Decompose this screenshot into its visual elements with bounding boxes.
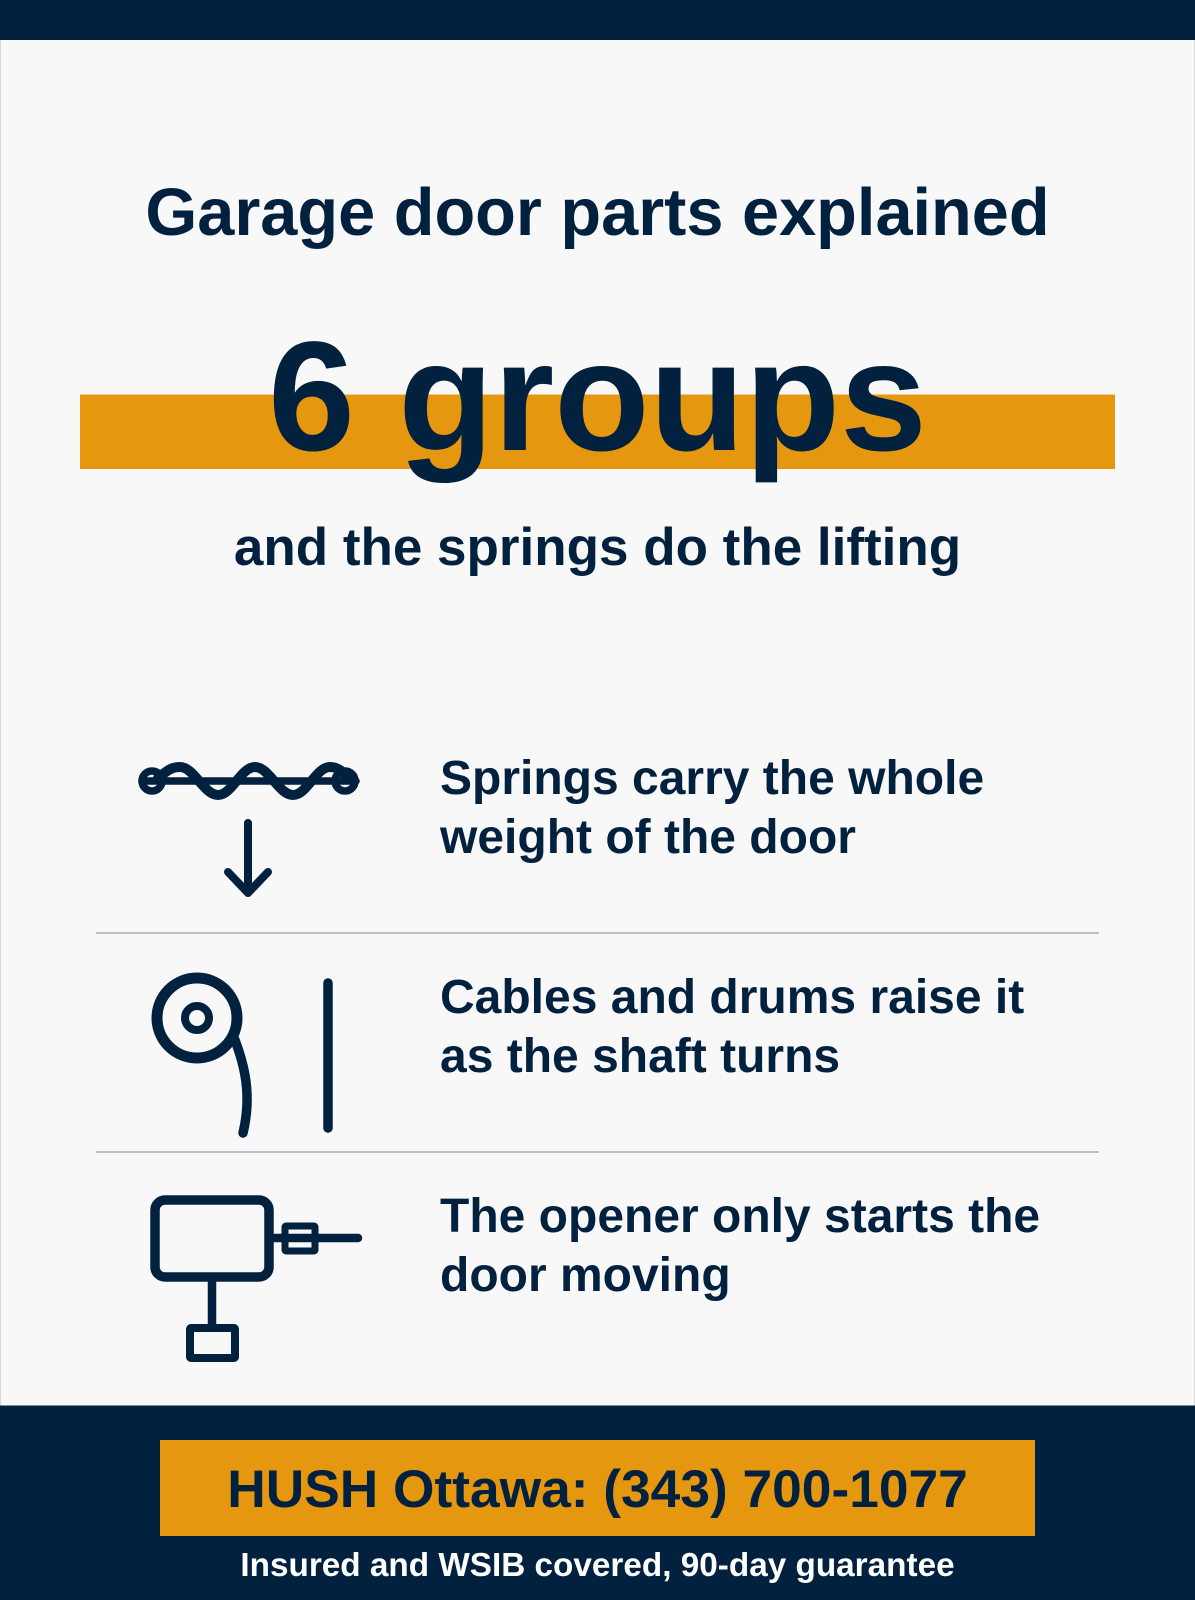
phone number: HUSH Ottawa: (343) 700-1077 (227, 1460, 968, 1519)
guarantee line: Insured and WSIB covered, 90-day guarantee (240, 1547, 955, 1584)
call to action box (160, 1440, 1035, 1536)
text: opener: The opener only starts the (440, 1190, 1040, 1243)
highlight band (80, 394, 1115, 469)
footer band (0, 1406, 1195, 1600)
text: cables: Cables and drums raise it (440, 971, 1024, 1024)
title: Garage door parts explained (145, 176, 1050, 250)
divider (96, 932, 1099, 934)
icon: spring with down arrow (142, 767, 356, 893)
divider (96, 1151, 1099, 1153)
top bar (0, 0, 1195, 40)
text: cables: as the shaft turns (440, 1030, 840, 1083)
text: springs: Springs carry the whole (440, 752, 984, 805)
subtitle: and the springs do the lifting (234, 518, 961, 577)
icon: opener (155, 1200, 358, 1358)
icon: drum and cable (157, 978, 328, 1133)
text: springs: weight of the door (439, 811, 856, 864)
big number: 6 groups: 6 groups (268, 310, 927, 484)
text: opener: door moving (440, 1249, 731, 1302)
